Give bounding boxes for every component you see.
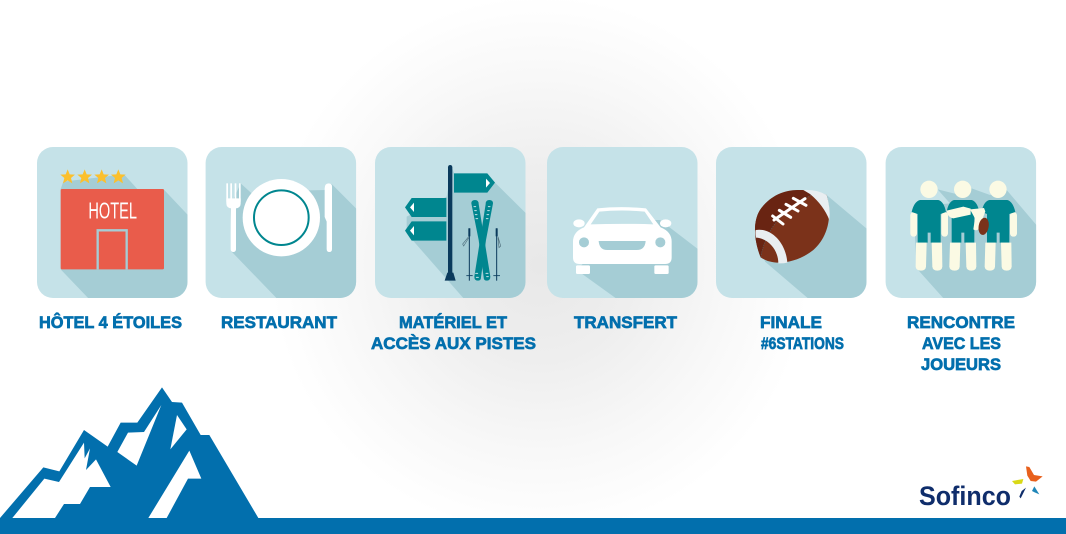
long shadow (230, 179, 358, 300)
label: matériel et accès aux pistes: ACCÈS AUX PISTES (371, 334, 536, 353)
tile background (37, 147, 188, 298)
logo: Sofinco (919, 466, 1043, 511)
icon: hotel (60, 169, 164, 269)
panel: transfert (547, 147, 698, 300)
label: rencontre avec les joueurs: RENCONTRE (907, 313, 1015, 332)
label: restaurant: RESTAURANT (221, 313, 338, 332)
long shadow (764, 190, 866, 298)
tile background (375, 147, 526, 298)
icon: car (573, 207, 672, 274)
label: matériel et accès aux pistes: MATÉRIEL ET (399, 313, 508, 332)
label: transfert: TRANSFERT (574, 313, 678, 332)
tile background (547, 147, 698, 298)
long shadow (61, 174, 190, 300)
panel: finale #6stations (716, 147, 868, 300)
icon: plate and cutlery (226, 179, 332, 256)
panel: matériel et accès aux pistes (375, 147, 527, 300)
long shadow (913, 188, 1038, 300)
label: rencontre avec les joueurs: JOUEURS (921, 355, 1001, 374)
label: finale #6stations: #6STATIONS (761, 334, 844, 353)
icon: hotel: HOTEL (88, 197, 137, 223)
logo: Sofinco: Sofinco (919, 481, 1011, 511)
long shadow (407, 167, 527, 300)
panel: restaurant (206, 147, 358, 300)
icon: rugby ball (755, 190, 830, 263)
icon: signpost and skis (405, 165, 501, 281)
tile background (886, 147, 1036, 298)
panel: rencontre avec les joueurs (886, 147, 1038, 300)
panel: hôtel 4 étoiles (37, 147, 190, 300)
tile background (206, 147, 356, 298)
label: hôtel 4 étoiles: HÔTEL 4 ÉTOILES (39, 313, 182, 332)
long shadow (577, 220, 698, 300)
label: finale #6stations (760, 313, 844, 353)
mountain illustration (0, 387, 258, 520)
label: finale #6stations: FINALE (760, 313, 822, 332)
tile background (716, 147, 866, 298)
label: rencontre avec les joueurs: AVEC LES (922, 334, 1001, 353)
label: rencontre avec les joueurs (907, 313, 1015, 374)
icon: three players (910, 181, 1017, 271)
bottom bar (0, 518, 1066, 534)
label: matériel et accès aux pistes (371, 313, 536, 353)
